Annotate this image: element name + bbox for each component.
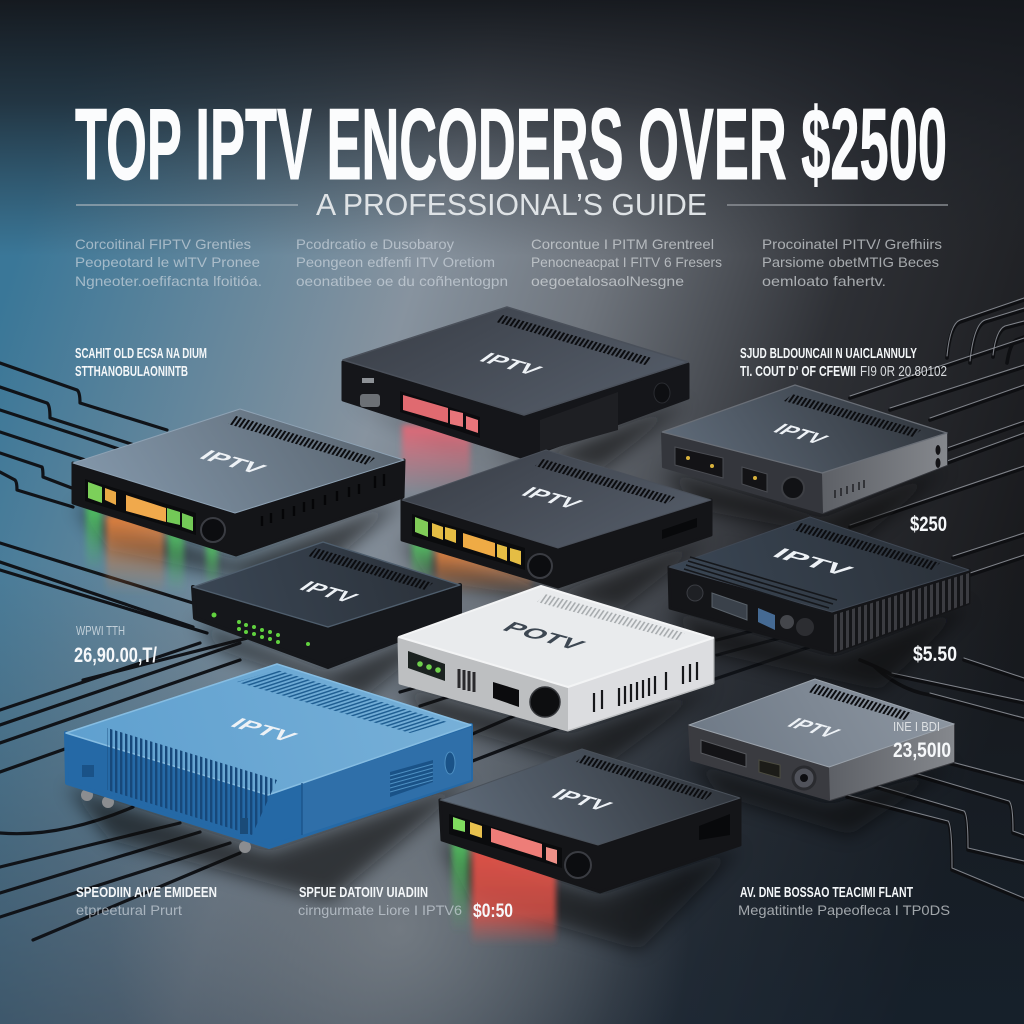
device: left encoder	[73, 409, 404, 555]
device: blue encoder: IPTV	[225, 715, 303, 745]
caption: bottom right: AV. DNE BOSSAO TEACIMI FLANT	[740, 884, 913, 901]
device: white POTV encoder	[399, 586, 713, 730]
callout: left price	[74, 623, 157, 667]
caption: bottom centre	[298, 884, 462, 918]
device: bottom centre encoder: IPTV	[546, 786, 618, 814]
device: blue encoder	[66, 664, 471, 853]
intro text column 4	[762, 236, 942, 289]
caption: bottom left: SPEODIIN AIVE EMIDEEN	[76, 884, 217, 901]
device: grey lower right encoder	[689, 679, 954, 800]
callout: upper right	[740, 345, 947, 380]
device: bottom centre encoder	[440, 749, 740, 892]
callout: upper left	[75, 345, 207, 380]
caption: bottom right: Megatitintle Papeofleca I TP0DS	[738, 902, 950, 918]
device: upper right encoder	[662, 385, 947, 513]
device: right middle encoder	[669, 517, 969, 653]
callout: upper right: TI. COUT D' OF CFEWII	[740, 363, 856, 380]
device: right middle encoder: IPTV	[767, 545, 859, 579]
intro text column 2	[296, 236, 508, 289]
cables: left bundle	[0, 363, 860, 940]
intro text column 3: Penocneacpat I FITV 6 Fresers	[531, 254, 722, 270]
device: small dark encoder	[193, 542, 460, 667]
caption: bottom left: etpreetural Prurt	[76, 902, 182, 918]
device: left encoder: IPTV	[194, 447, 272, 477]
callout: right price: INE I BDI	[893, 719, 940, 734]
price: $250: $250	[910, 513, 947, 536]
device: top centre encoder: IPTV	[474, 349, 548, 378]
device: centre encoder: IPTV	[516, 484, 588, 512]
device reflections and floor shadows	[67, 400, 969, 950]
caption: bottom centre: SPFUE DATOIIV UIADIIN	[299, 884, 428, 901]
device: white POTV encoder: POTV	[497, 619, 591, 653]
cables: right bundle	[847, 298, 1024, 900]
intro text column 1: Ngneoter.oefifacnta lfoitióa.	[75, 273, 262, 289]
device: grey lower right encoder: IPTV	[782, 715, 846, 741]
callout: upper left: SCAHIT OLD ECSA NA DIUM	[75, 345, 207, 362]
caption: bottom right	[738, 884, 950, 918]
callout: left price: 26,90.00,T/	[74, 644, 157, 667]
intro text column 2: Pcodrcatio e Dusobaroy	[296, 236, 454, 252]
intro text column 3	[531, 236, 722, 289]
device: top centre encoder	[343, 307, 688, 458]
intro text column 4: oemloato fahertv.	[762, 273, 886, 289]
callout: left price: WPWI TTH	[76, 623, 125, 638]
intro text column 1: Peopeotard le wlTV Pronee	[75, 254, 260, 270]
device: upper right encoder: IPTV	[768, 421, 834, 447]
intro text column 2: Peongeon edfenfi ITV Oretiom	[296, 254, 495, 270]
caption: bottom centre: cirngurmate Liore I IPTV6	[298, 902, 462, 918]
callout: upper right: SJUD BLDOUNCAII N UAICLANNULY	[740, 345, 917, 362]
intro text column 1	[75, 236, 262, 289]
intro text column 4: Parsiome obetMTIG Beces	[762, 254, 939, 270]
intro text column 4: Procoinatel PITV/ Grefhiirs	[762, 236, 942, 252]
callout: upper left: STTHANOBULAONINTB	[75, 363, 188, 380]
intro text column 1: Corcoitinal FIPTV Grenties	[75, 236, 251, 252]
caption: bottom left	[76, 884, 217, 918]
callout: right price: 23,50I0	[893, 739, 951, 762]
callout: right price	[893, 719, 951, 762]
callout: upper right: FI9 0R 20.80102	[860, 363, 947, 380]
subtitle with rules: A PROFESSIONAL’S GUIDE	[316, 187, 707, 222]
device: small dark encoder: IPTV	[294, 578, 364, 606]
intro text column 3: Corcontue I PITM Grentreel	[531, 236, 714, 252]
intro text column 3: oegoetalosaolNesgne	[531, 273, 684, 289]
device: centre encoder	[402, 450, 711, 587]
price: $0:50: $0:50	[473, 901, 513, 922]
price: $5.50: $5.50	[913, 643, 957, 666]
intro text column 2: oeonatibee oe du coñhentogpn	[296, 273, 508, 289]
